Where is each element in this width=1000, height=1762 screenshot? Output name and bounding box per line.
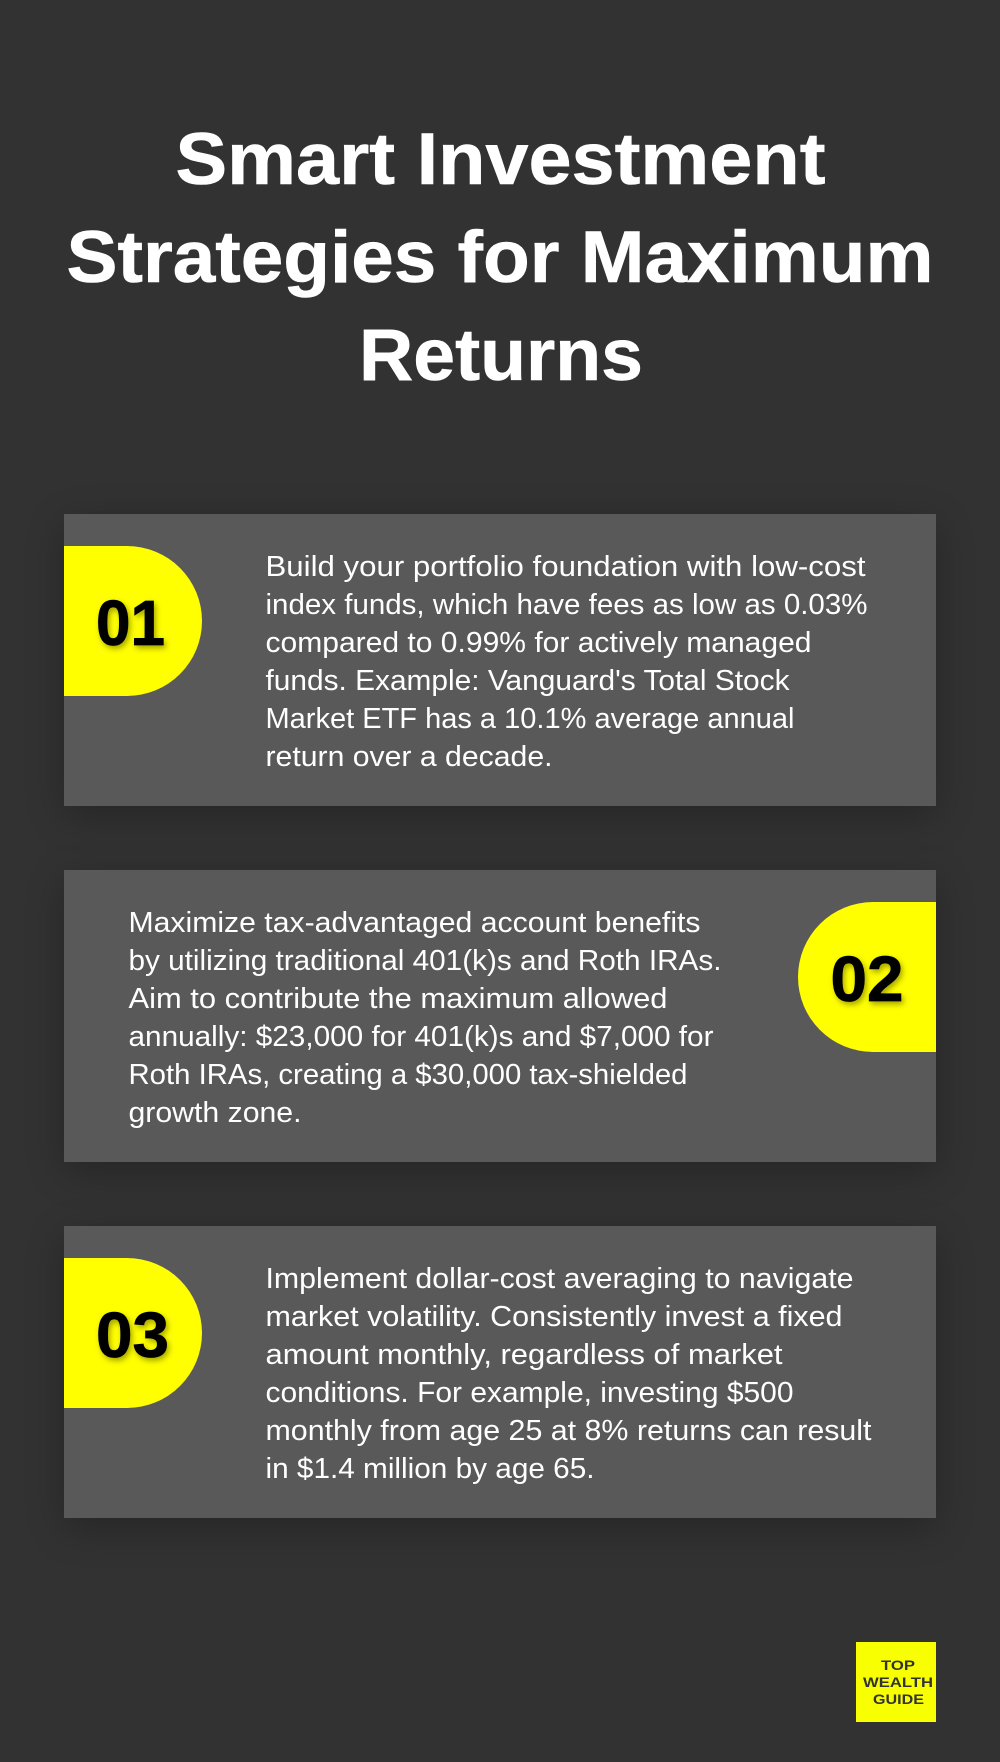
text block: step 03: in $1.4 million by age 65.: [266, 1453, 594, 1485]
logo: Top Wealth Guide: GUIDE: [873, 1691, 924, 1707]
text block: step 03: market volatility. Consistently invest a fixed: [266, 1301, 842, 1333]
text block: step 02: Maximize tax-advantaged account benefits: [128, 907, 700, 939]
logo: Top Wealth Guide: [856, 1642, 936, 1722]
text block: step 01: funds. Example: Vanguard's Total Stock: [266, 665, 790, 697]
title: [66, 119, 934, 396]
text block: step 01: [266, 551, 868, 773]
text block: step 03: monthly from age 25 at 8% returns can result: [266, 1415, 872, 1447]
text block: step 03: Implement dollar-cost averaging to navigate: [266, 1263, 854, 1295]
text block: step 01: index funds, which have fees as low as 0.03%: [266, 589, 868, 621]
title: Strategies for Maximum: [66, 217, 934, 298]
panel: step 03: [64, 1226, 936, 1528]
badge: 03: 03: [96, 1299, 169, 1371]
title: Smart Investment: [176, 119, 826, 200]
panel: step 01: [64, 514, 936, 816]
text block: step 03: conditions. For example, investing $500: [266, 1377, 794, 1409]
badge: 03: [64, 1258, 202, 1408]
badge: 01: [64, 546, 202, 696]
text block: step 01: return over a decade.: [266, 741, 552, 773]
badge: 02: 02: [830, 943, 904, 1015]
title: Returns: [359, 315, 643, 396]
text block: step 03: amount monthly, regardless of market: [266, 1339, 782, 1371]
badge: 01: 01: [96, 587, 165, 659]
text block: step 02: [128, 907, 722, 1129]
text block: step 02: growth zone.: [128, 1097, 302, 1129]
text block: step 01: compared to 0.99% for actively managed: [266, 627, 812, 659]
text block: step 02: Aim to contribute the maximum allowed: [128, 983, 668, 1015]
badge: 02: [798, 902, 936, 1052]
text block: step 03: [266, 1263, 872, 1485]
text block: step 01: Market ETF has a 10.1% average annual: [266, 703, 794, 735]
panel: step 02: [64, 870, 936, 1172]
text block: step 02: annually: $23,000 for 401(k)s and $7,000 for: [128, 1021, 714, 1053]
logo: Top Wealth Guide: WEALTH: [863, 1674, 933, 1690]
text block: step 01: Build your portfolio foundation with low-cost: [266, 551, 866, 583]
logo: Top Wealth Guide: TOP: [881, 1657, 915, 1673]
text block: step 02: Roth IRAs, creating a $30,000 tax-shielded: [128, 1059, 687, 1091]
text block: step 02: by utilizing traditional 401(k)s and Roth IRAs.: [128, 945, 722, 977]
